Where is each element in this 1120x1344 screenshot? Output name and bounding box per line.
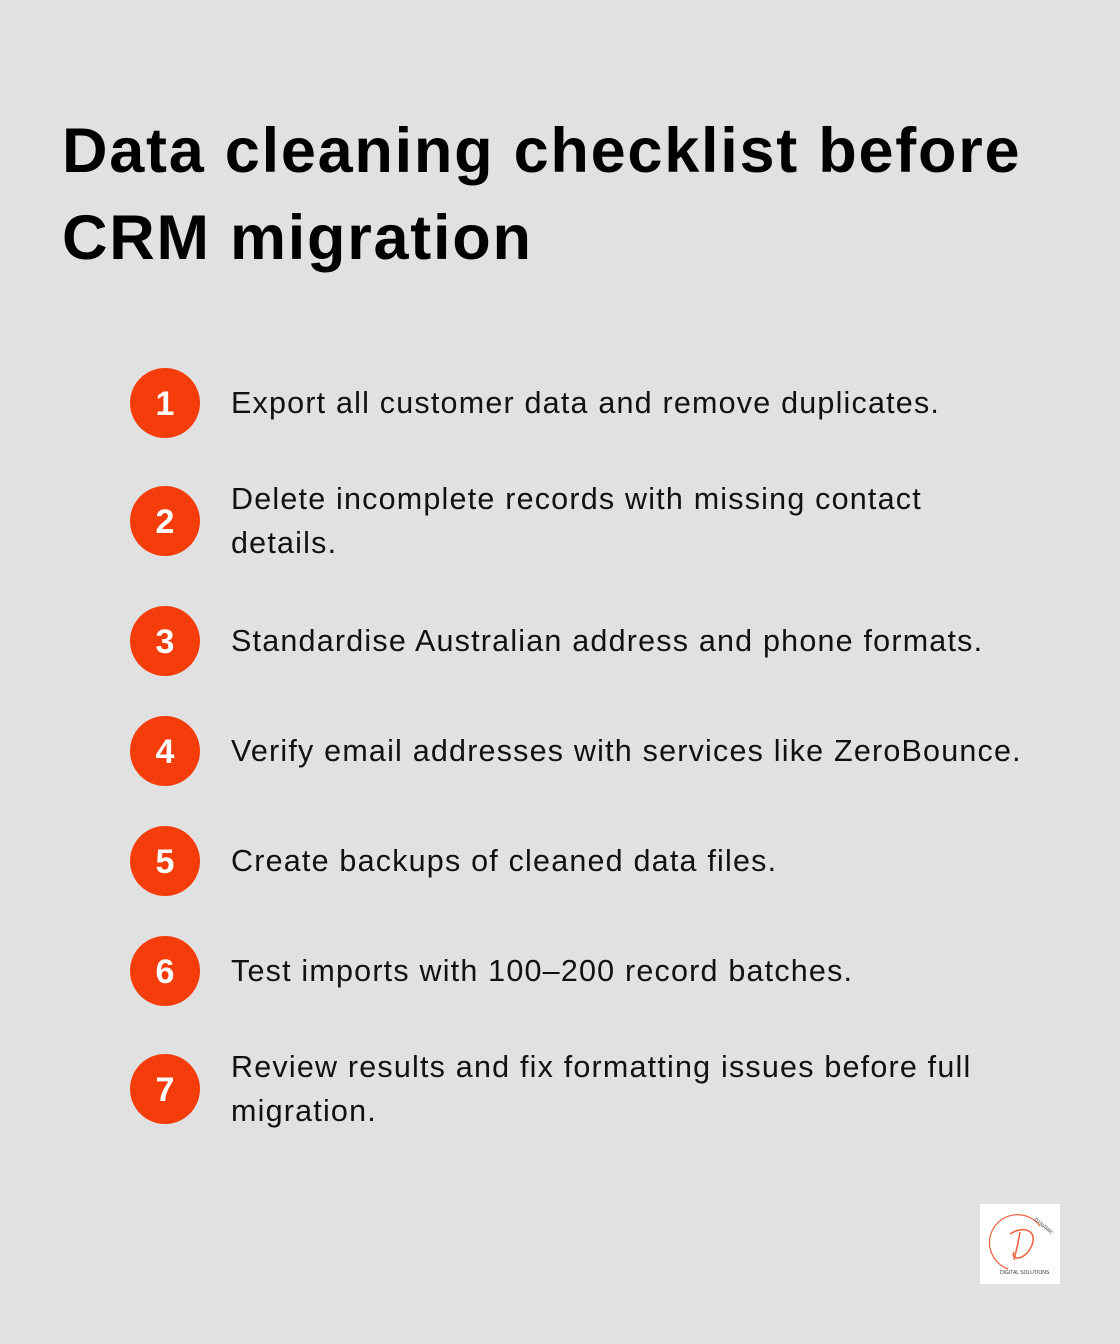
item 6: Test imports with 100–200 record batches. (231, 954, 853, 988)
title: CRM migration (62, 203, 533, 273)
item 2: details. (231, 526, 337, 560)
item 4: Verify email addresses with services like ZeroBounce. (231, 734, 1022, 768)
item 6 (130, 936, 853, 1006)
item 2 (130, 482, 922, 560)
item 3: 3 (156, 623, 174, 661)
item 5 (130, 826, 777, 896)
item 3: Standardise Australian address and phone formats. (231, 624, 983, 658)
item 1: 1 (156, 385, 174, 423)
item 3 (130, 606, 983, 676)
item 5: 5 (156, 843, 174, 881)
item 2: 2 (156, 503, 174, 541)
item 7: migration. (231, 1094, 377, 1128)
item 4: 4 (156, 733, 174, 771)
logo (980, 1204, 1060, 1284)
item 2: Delete incomplete records with missing contact (231, 482, 922, 516)
item 7: 7 (156, 1071, 174, 1109)
item 7 (130, 1050, 971, 1128)
item 4 (130, 716, 1022, 786)
item 5: Create backups of cleaned data files. (231, 844, 777, 878)
item 7: Review results and fix formatting issues before full (231, 1050, 971, 1084)
item 1: Export all customer data and remove duplicates. (231, 386, 940, 420)
item 6: 6 (156, 953, 174, 991)
title: Data cleaning checklist before (62, 116, 1021, 186)
logo: DIGITAL SOLUTIONS (1000, 1270, 1050, 1276)
title (62, 116, 1021, 273)
logo: DYNAMIC (1033, 1217, 1055, 1237)
item 1 (130, 368, 940, 438)
